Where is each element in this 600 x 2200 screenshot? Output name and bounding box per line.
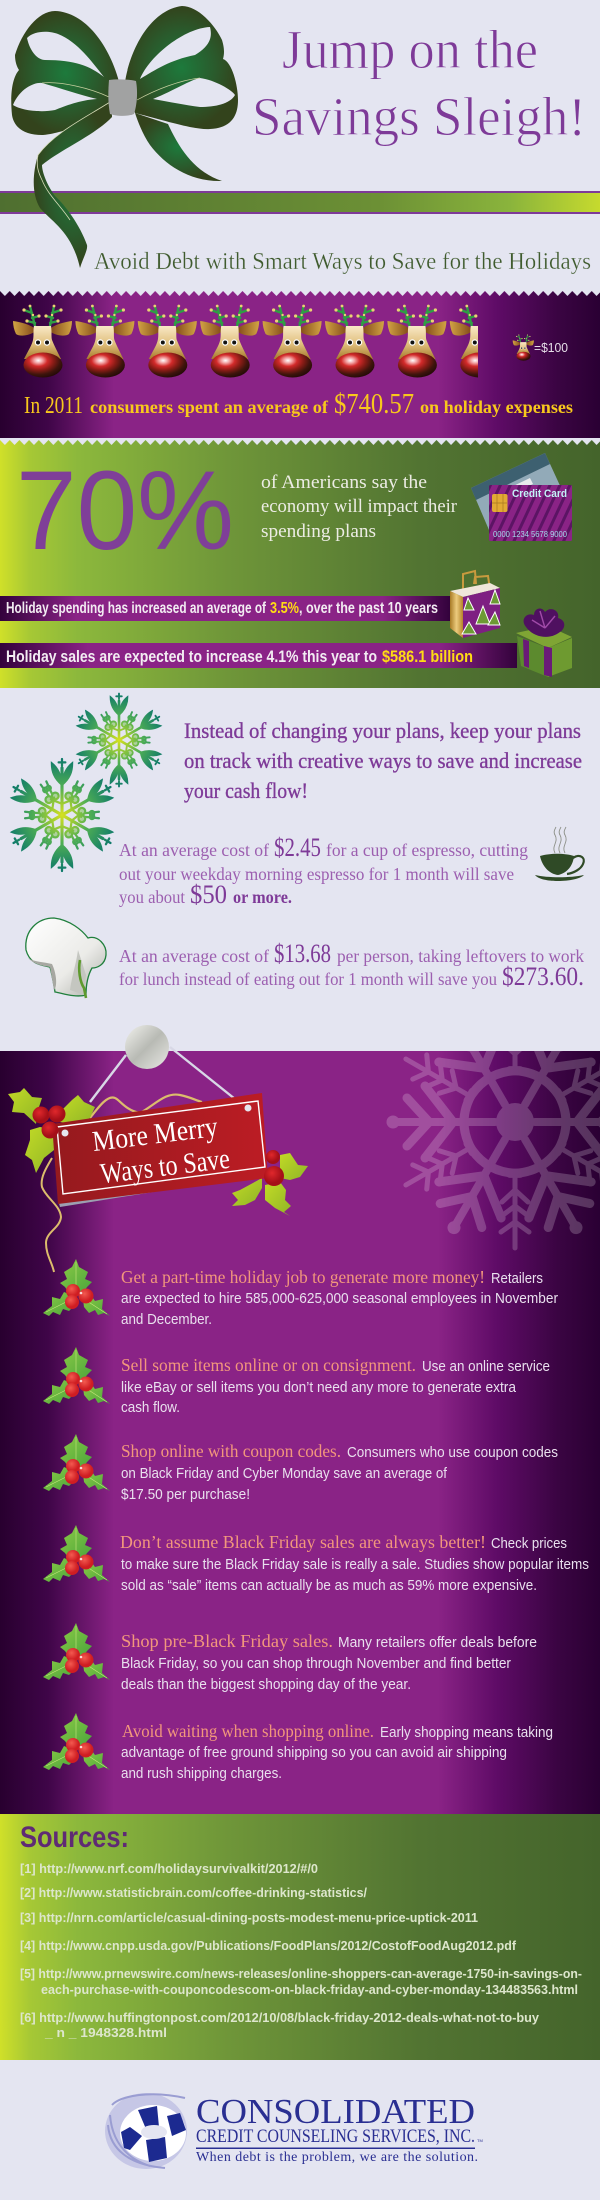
text: espresso saving: for a cup of espresso, cutting [326,840,528,860]
icon: hanging sign [8,1025,308,1272]
icon: holly [43,1713,110,1770]
tip text: and December. [121,1311,212,1328]
tip text: Black Friday, so you can shop through November and find better [121,1655,511,1672]
stat text: average holiday spend: $740.57 [334,388,414,420]
tip text: like eBay or sell items you don’t need any more to generate extra [121,1379,517,1396]
tip text [121,1721,553,1782]
source list: [6] http://www.huffingtonpost.com/2012/10/08/black-friday-2012-deals-what-not-to-buy [20,2010,540,2025]
intro text: Instead of changing your plans, keep your plans [184,718,581,743]
tip text: cash flow. [121,1399,180,1416]
title [252,19,586,147]
tip text: deals than the biggest shopping day of the year. [121,1676,411,1693]
tip text [121,1267,558,1328]
bar: holiday spending: 3.5% [270,600,299,617]
bar: holiday sales: $586.1 billion [382,647,473,666]
icon: holly [43,1434,110,1491]
subtitle: Avoid Debt with Smart Ways to Save for the Holidays [94,249,591,275]
source list [20,1861,582,2040]
icon: shell and lifebuoy [105,2093,187,2169]
icon: credit cards: Credit Card [512,488,567,500]
tip 2 [43,1347,550,1416]
tip text: Avoid waiting when shopping online. [122,1721,374,1741]
panel: sources [0,1814,600,2060]
icon: credit cards [471,453,572,541]
icon: coffee cup [535,827,584,881]
bar: holiday sales [0,643,517,668]
text: espresso saving: out your weekday morning espresso for 1 month will save [119,864,514,884]
text: Americans economy: spending plans [261,521,376,542]
bar: holiday spending [0,596,450,621]
text: espresso saving: or more. [233,887,292,907]
intro text [184,718,582,803]
title: Jump on the [282,19,538,80]
stat text: average holiday spend: consumers spent an average of [90,397,329,417]
text: Americans economy: of Americans say the [261,472,427,493]
text: leftovers saving [119,939,584,991]
icon: green bow [11,6,238,268]
tip text: Check prices [491,1535,567,1552]
legend: reindeer equals $100: =$100 [534,340,568,355]
stat text: average holiday spend: In 2011 [24,393,83,419]
source list: [5] http://www.prnewswire.com/news-releases/online-shoppers-can-average-1750-in-savings-on- [20,1966,582,1981]
stat text: average holiday spend: on holiday expenses [420,397,573,417]
source list: [1] http://www.nrf.com/holidaysurvivalkit/2012/#/0 [20,1861,318,1876]
icon: shopping bag [450,571,500,638]
bar: holiday sales: Holiday sales are expected to increase 4.1% this year to [6,647,377,666]
text: espresso saving: At an average cost of [119,840,269,860]
text: espresso saving: you about [119,887,185,907]
tip text: Many retailers offer deals before [338,1634,537,1651]
icon: holly [43,1347,110,1404]
icon: chef hat [26,918,106,998]
source list: [2] http://www.statisticbrain.com/coffee-drinking-statistics/ [20,1885,367,1900]
reindeer pictogram row [13,305,509,378]
company name: CONSOLIDATED [196,2092,475,2131]
tip text: Consumers who use coupon codes [347,1444,558,1461]
icon: holly [43,1525,110,1582]
intro text: on track with creative ways to save and increase [184,748,582,773]
tip text: Shop online with coupon codes. [121,1441,341,1461]
tip text: sold as “sale” items can actually be as much as 59% more expensive. [121,1577,537,1594]
icon: hanging sign: Ways to Save [99,1143,232,1190]
icon: snowflake bottom [6,759,118,871]
logo: Consolidated Credit Counseling Services [105,2092,483,2169]
tip 5 [43,1623,537,1693]
tip text [120,1532,589,1594]
tip text: Early shopping means taking [380,1724,553,1741]
tip text: Get a part-time holiday job to generate more money! [121,1267,485,1287]
source list: [4] http://www.cnpp.usda.gov/Publications/FoodPlans/2012/CostofFoodAug2012.pdf [20,1938,517,1953]
tip text: Don’t assume Black Friday sales are always better! [120,1532,486,1552]
panel: creative ways to save [6,694,584,998]
icon: snowflake top [72,694,166,786]
icon: hanging sign: More Merry [91,1111,220,1158]
panel: more merry ways to save [0,993,600,1814]
tip 3 [43,1434,558,1503]
icon: gift box [516,608,572,677]
tip text: $17.50 per purchase! [121,1486,250,1503]
panel: 70% stat [0,438,600,688]
tip text: on Black Friday and Cyber Monday save an average of [121,1465,448,1482]
sources heading: Sources: [20,1821,129,1854]
bar: holiday spending: Holiday spending has increased an average of [6,600,266,617]
icon: large faint snowflake [386,1051,600,1250]
tip text [121,1441,558,1503]
text: espresso saving: $50 [190,880,227,909]
text: espresso saving [119,833,528,909]
source list: [3] http://nrn.com/article/casual-dining-posts-modest-menu-price-uptick-2011 [20,1910,478,1925]
text: leftovers saving: At an average cost of [119,946,269,966]
panel: header [0,6,600,275]
tip text: Shop pre-Black Friday sales. [121,1631,333,1651]
icon: holly [43,1259,110,1316]
legend: reindeer equals $100 [513,334,568,361]
stat text: average holiday spend [24,388,573,420]
source list: each-purchase-with-couponcodescom-on-black-friday-and-cyber-monday-134483563.html [41,1982,578,1997]
text: Americans economy: economy will impact their [261,496,458,517]
text: leftovers saving: $13.68 [274,939,331,968]
icon: credit cards: 0000 1234 5678 9000 [493,530,568,539]
tip 4 [43,1525,589,1594]
text: leftovers saving: $273.60. [502,962,584,991]
big number 70%: 70% [16,448,234,573]
text: leftovers saving: per person, taking leftovers to work [337,946,584,966]
tip 6 [43,1713,553,1782]
tip text: advantage of free ground shipping so you can avoid air shipping [121,1744,507,1761]
intro text: your cash flow! [184,778,308,803]
logo: Consolidated Credit Counseling Services: CREDIT COUNSELING SERVICES, INC. [196,2126,475,2147]
tagline: When debt is the problem, we are the solution. [196,2150,478,2165]
text: leftovers saving: for lunch instead of eating out for 1 month will save you [119,969,497,989]
icon: holly [43,1623,110,1680]
panel: holiday expenses [0,291,600,438]
logo: Consolidated Credit Counseling Services: TM [477,2138,483,2143]
tip text: Retailers [491,1270,543,1287]
green ribbon band [0,191,600,214]
tip text: Sell some items online or on consignment. [121,1355,416,1375]
tip text: and rush shipping charges. [121,1765,282,1782]
tip text: Use an online service [422,1358,550,1375]
text: Americans economy [261,472,458,542]
tip text: are expected to hire 585,000-625,000 seasonal employees in November [121,1290,558,1307]
text: espresso saving: $2.45 [274,833,321,862]
tip 1 [43,1259,558,1328]
source list: _ n _ 1948328.html [44,2025,167,2040]
title: Savings Sleigh! [252,86,586,147]
bar: holiday spending: , over the past 10 years [299,600,438,617]
tip text [121,1631,537,1693]
tip text [121,1355,550,1416]
